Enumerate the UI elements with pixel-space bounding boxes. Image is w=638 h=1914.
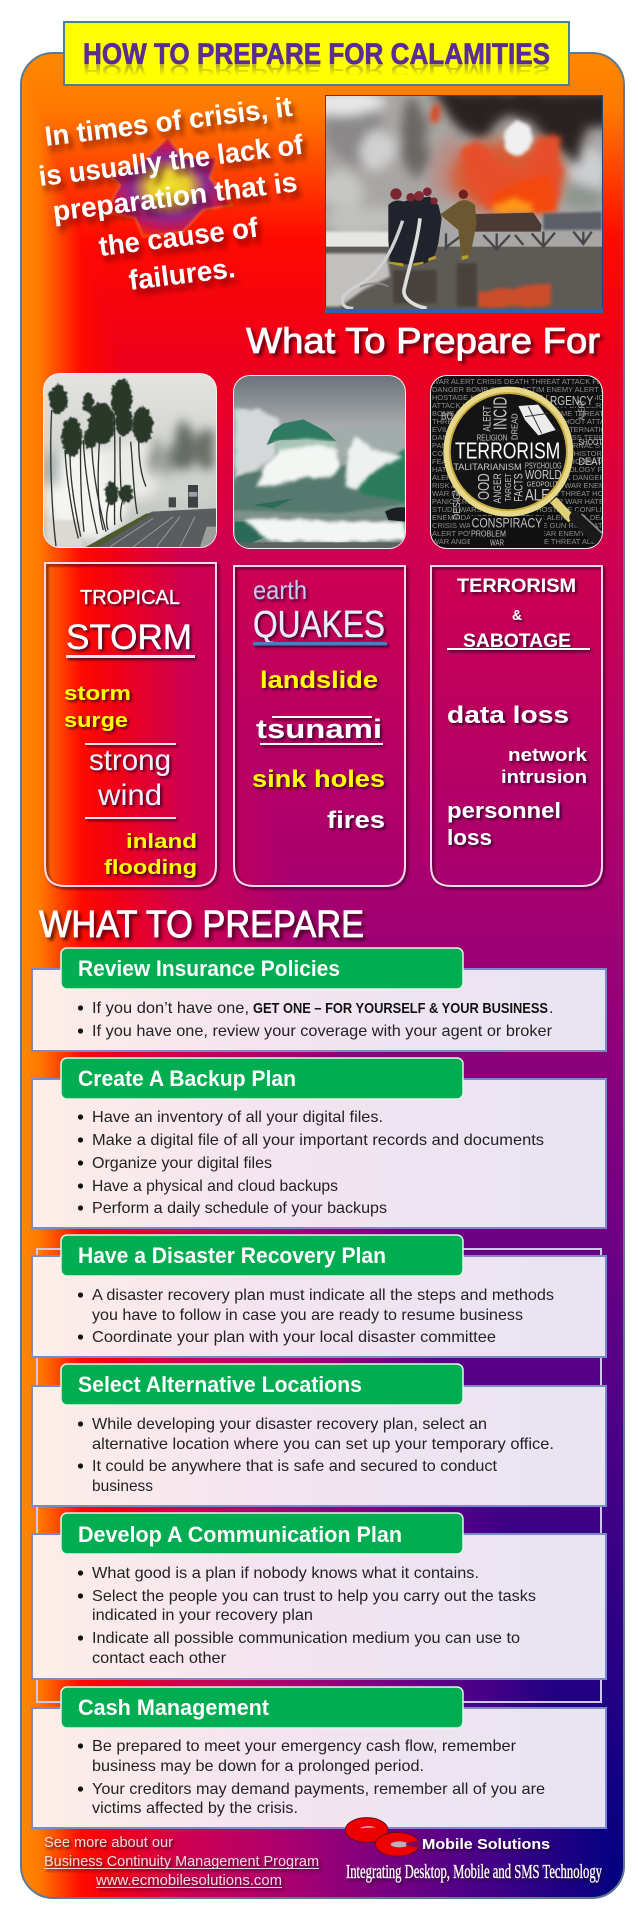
photo: terrorism magnifier: ANGER	[492, 473, 504, 503]
logo: ec mobile solutions: Mobile Solutions	[422, 1836, 550, 1853]
bullet list	[78, 1109, 544, 1217]
outer words: RGENCY	[550, 394, 594, 408]
section header: Create A Backup Plan	[78, 1066, 296, 1091]
photo: firefighters	[325, 95, 603, 313]
bullet list: If you don’t have one,	[92, 1000, 249, 1017]
section: communication plan	[32, 1513, 606, 1679]
title: HOW TO PREPARE FOR CALAMITIES	[83, 38, 550, 71]
inland flooding	[104, 831, 197, 879]
photo: big wave	[233, 375, 407, 550]
bullet list	[78, 1287, 554, 1346]
section header	[61, 1513, 463, 1554]
bullet list: .	[549, 1000, 553, 1017]
tsunami: tsunami	[256, 714, 382, 744]
inland flooding: flooding	[104, 857, 197, 879]
panel: terrorism and sabotage	[431, 566, 602, 886]
bullet list: Select the people you can trust to help you carry out the tasks	[92, 1588, 536, 1605]
storm surge: storm	[64, 683, 131, 705]
bullet list: indicated in your recovery plan	[92, 1607, 313, 1624]
sabotage label: SABOTAGE	[463, 631, 571, 652]
quakes heading: QUAKES	[253, 604, 385, 646]
quote text: failures.	[127, 252, 237, 296]
heading: what to prepare: WHAT TO PREPARE	[39, 904, 364, 946]
photo: storm palms	[40, 370, 220, 550]
quote text: In times of crisis, it	[43, 91, 294, 152]
outer words: WAR	[490, 538, 504, 547]
bullet list: business may be down for a prolonged period.	[92, 1758, 424, 1775]
section: create a backup plan	[32, 1058, 606, 1228]
heading: what to prepare for: What To Prepare For	[246, 320, 600, 361]
personnel loss	[447, 798, 561, 850]
bullet list: It could be anywhere that is safe and secured to conduct	[92, 1458, 498, 1475]
photo: terrorism magnifier: FACTS	[511, 473, 525, 502]
bullet list: Perform a daily schedule of your backups	[92, 1200, 387, 1217]
quote text: is usually the lack of	[37, 129, 305, 192]
outer words: CONSPIRACY	[472, 514, 543, 530]
quote text	[37, 91, 305, 296]
logo: ec mobile solutions	[345, 1818, 602, 1883]
bullet list: GET ONE – FOR YOURSELF & YOUR BUSINESS	[253, 1000, 548, 1017]
bullet list: business	[92, 1478, 153, 1495]
section: review insurance policies	[32, 948, 606, 1051]
terrorism label: TERRORISM	[457, 576, 576, 597]
bullet list: Coordinate your plan with your local disaster committee	[92, 1329, 496, 1346]
bullet list: What good is a plan if nobody knows what it contains.	[92, 1565, 479, 1582]
quote text: the cause of	[97, 212, 260, 262]
bullet list: you have to follow in case you are ready to resume business	[92, 1307, 523, 1324]
outer words: PROBLEM	[471, 529, 506, 539]
network intrusion	[501, 744, 588, 787]
network intrusion: intrusion	[501, 766, 587, 787]
icon: ec mark	[345, 1818, 420, 1856]
title banner	[64, 22, 569, 85]
section header	[61, 1364, 463, 1405]
photo: terrorism magnifier: INCID	[490, 397, 511, 430]
personnel loss: loss	[447, 825, 492, 850]
section header	[61, 1687, 463, 1728]
bullet list: Make a digital file of all your important records and documents	[92, 1132, 544, 1149]
storm surge: surge	[64, 710, 128, 732]
section header: Cash Management	[78, 1695, 270, 1720]
photo: terrorism magnifier: TALITARIANISM	[453, 462, 522, 472]
back frame	[37, 1249, 601, 1702]
ampersand: &	[512, 607, 522, 624]
bullet list: Your creditors may demand payments, remember all of you are	[92, 1781, 545, 1798]
bullet list: alternative location where you can set up your temporary office.	[92, 1436, 554, 1453]
section header: Select Alternative Locations	[78, 1372, 362, 1397]
photo: terrorism magnifier: WORLD	[525, 468, 562, 482]
bullet list: Have an inventory of all your digital files.	[92, 1109, 383, 1126]
strong wind	[89, 744, 171, 812]
photo: terrorism magnifier: PSYCHOLOG	[525, 461, 562, 470]
photo: terrorism magnifier: TERRORISM	[455, 438, 560, 464]
bullet list: Be prepared to meet your emergency cash flow, remember	[92, 1738, 517, 1755]
network intrusion: network	[508, 744, 588, 765]
outer words: DEAT	[578, 456, 603, 468]
bullet list	[78, 1416, 554, 1495]
outer words: BO	[441, 411, 453, 422]
outer words	[441, 394, 603, 548]
strong wind: strong	[89, 744, 171, 777]
bullet list: Have a physical and cloud backups	[92, 1178, 338, 1195]
bullet list: victims affected by the crisis.	[92, 1800, 298, 1817]
bullet list: While developing your disaster recovery plan, select an	[92, 1416, 487, 1433]
star behind quote	[105, 137, 233, 237]
photo: terrorism magnifier: ALERT	[482, 406, 494, 432]
section header: Have a Disaster Recovery Plan	[78, 1243, 386, 1268]
title banner: HOW TO PREPARE FOR CALAMITIES	[83, 61, 550, 79]
bullet list	[78, 1000, 553, 1040]
section: cash management	[32, 1687, 606, 1828]
section header	[61, 1235, 463, 1276]
bullet list: Organize your digital files	[92, 1155, 272, 1172]
section header: Develop A Communication Plan	[78, 1522, 402, 1547]
sink holes: sink holes	[252, 766, 385, 793]
outer words: DESIGN	[452, 487, 463, 520]
footer links: Business Continuity Management Program	[44, 1853, 319, 1870]
footer links	[44, 1834, 319, 1889]
section header	[61, 1058, 463, 1099]
footer links: www.ecmobilesolutions.com	[95, 1872, 282, 1889]
panel: earthquakes	[234, 566, 405, 886]
inland flooding: inland	[126, 831, 197, 853]
bullet list	[78, 1565, 536, 1667]
panel: tropical storm	[45, 563, 216, 886]
section: disaster recovery plan	[32, 1235, 606, 1357]
outer words: SHOOT	[578, 437, 603, 447]
bullet list: If you have one, review your coverage with your agent or broker	[92, 1023, 553, 1040]
photo: terrorism magnifier: DREAD	[509, 413, 519, 440]
outer words: ALERT	[577, 400, 586, 420]
section header	[61, 948, 463, 989]
photo: terrorism magnifier: OOD	[476, 473, 493, 500]
photo: terrorism magnifier: RELIGION	[477, 433, 508, 442]
section: alternative locations	[32, 1364, 606, 1506]
photo: terrorism magnifier	[430, 375, 603, 549]
footer links: See more about our	[44, 1834, 173, 1851]
strong wind: wind	[97, 779, 162, 812]
earth label: earth	[253, 575, 307, 605]
landslide: landslide	[260, 667, 378, 694]
bullet list	[78, 1738, 545, 1817]
section header: Review Insurance Policies	[78, 956, 340, 981]
photo: terrorism magnifier: ALE	[525, 486, 550, 505]
photo: terrorism magnifier: TARGET	[503, 473, 513, 502]
personnel loss: personnel	[447, 798, 561, 823]
bullet list: Indicate all possible communication medium you can use to	[92, 1630, 520, 1647]
bullet list: A disaster recovery plan must indicate all the steps and methods	[92, 1287, 554, 1304]
quote text: preparation that is	[51, 166, 299, 227]
tropical label: TROPICAL	[80, 587, 180, 609]
bullet list: contact each other	[92, 1650, 227, 1667]
photo: terrorism magnifier: GEOPOLIT	[527, 480, 559, 489]
fires: fires	[327, 807, 385, 834]
storm heading: STORM	[66, 618, 192, 657]
data loss: data loss	[447, 702, 569, 729]
storm surge	[64, 683, 131, 732]
